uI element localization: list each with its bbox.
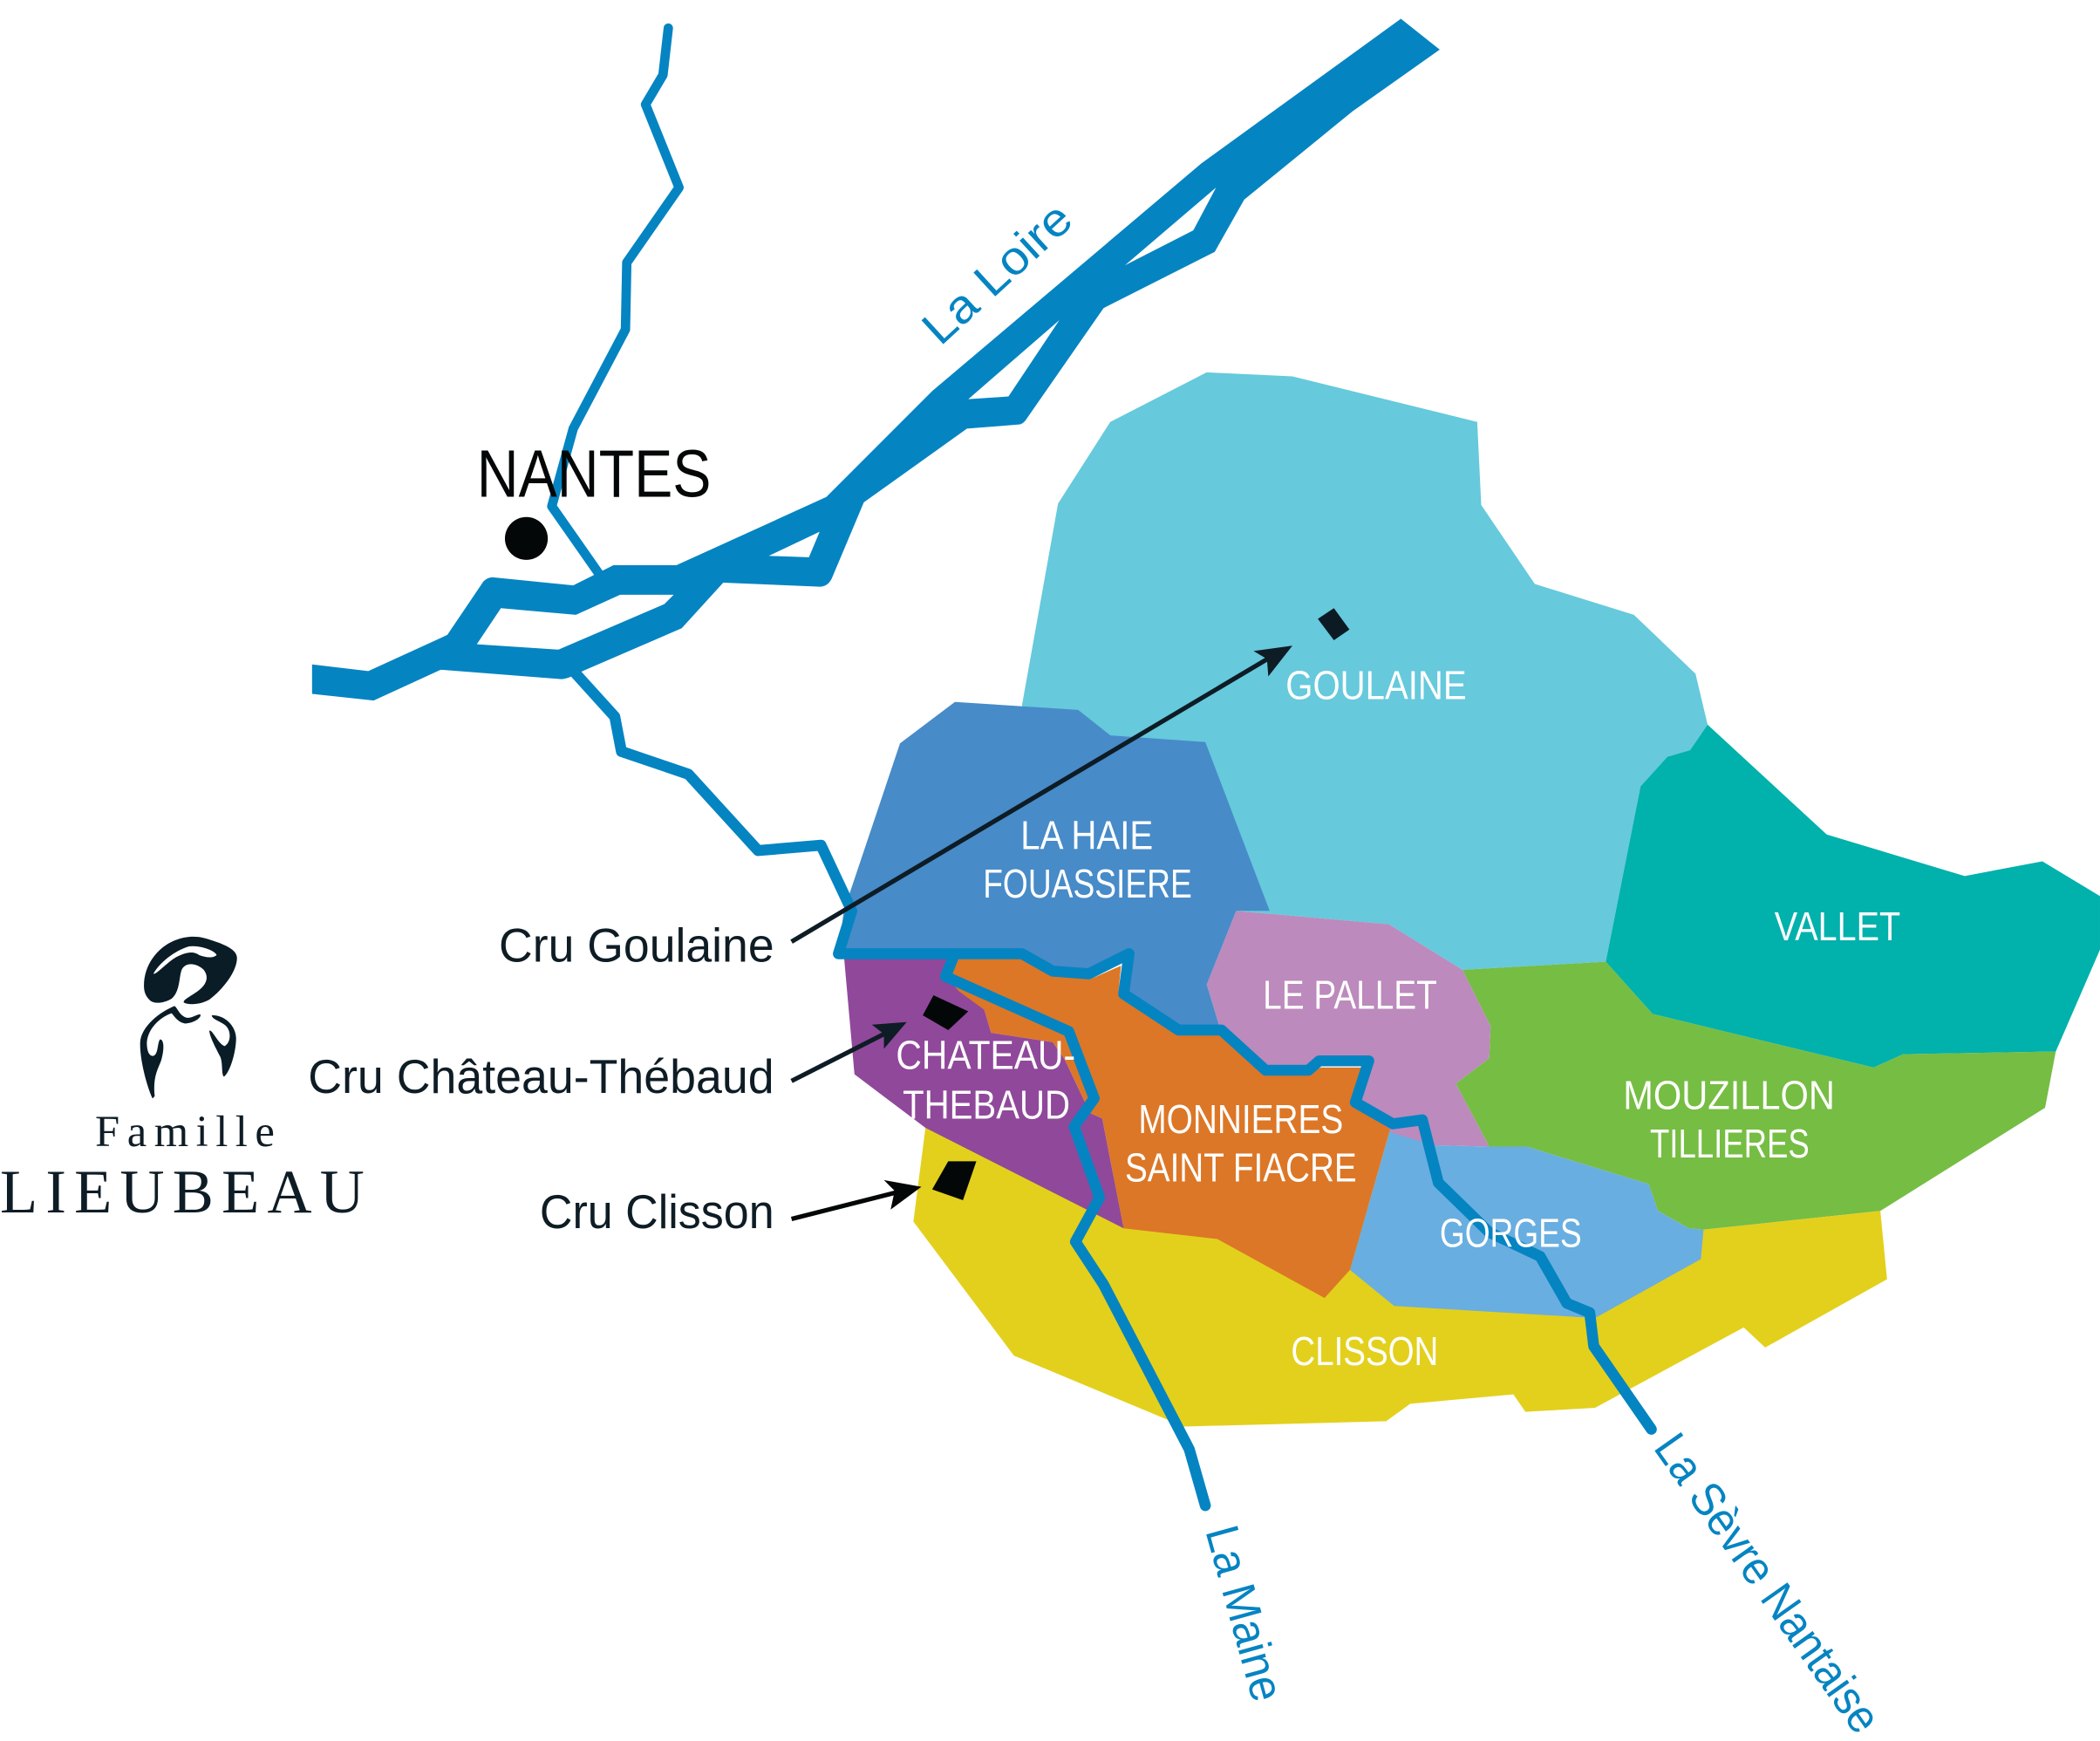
region label: La Haie Fouassiere: LA HAIE: [1020, 813, 1153, 858]
river label: La Loire: La Loire: [912, 192, 1082, 355]
logo text: Famille: Famille: [95, 1107, 275, 1156]
map regions: [838, 372, 2100, 1426]
region label: Mouzillon Tillieres: TILLIERES: [1650, 1121, 1810, 1166]
river: La Sevre Nantaise: [576, 673, 1652, 1430]
river: La Loire: [312, 18, 1440, 700]
region label: Le Pallet: LE PALLET: [1263, 972, 1437, 1017]
cru marker: Goulaine: [1318, 608, 1349, 640]
region label: La Haie Fouassiere: FOUASSIERE: [983, 861, 1192, 906]
region: Clisson: [913, 1128, 1887, 1426]
region label: Chateau-Thebaud: CHATEAU-: [896, 1032, 1075, 1077]
logo: Famille Lieubeau: [0, 937, 365, 1226]
region: Goulaine: [1022, 372, 1708, 970]
region label: Mouzillon Tillieres: [1623, 1073, 1835, 1166]
region label: Monnieres Saint Fiacre: [1125, 1096, 1357, 1190]
region label: La Haie Fouassiere: [983, 813, 1192, 906]
arrow: Cru Chateau-Thebaud: [792, 1022, 907, 1081]
region label: Monnieres Saint Fiacre: SAINT FIACRE: [1125, 1144, 1357, 1190]
region label: Chateau-Thebaud: [896, 1032, 1075, 1127]
cru marker: Clisson: [932, 1161, 977, 1200]
arrow: Cru Clisson: [792, 1180, 922, 1219]
cru marker: Chateau-Thebaud: [923, 995, 968, 1030]
river: northern tributary: [552, 28, 679, 573]
region: Monnieres Saint Fiacre: [945, 956, 1390, 1298]
region: Mouzillon Tillieres: [1456, 962, 2056, 1230]
river: La Maine: [945, 956, 1205, 1505]
region: Le Pallet: [1207, 911, 1490, 1147]
region label: Clisson: CLISSON: [1291, 1328, 1438, 1374]
label: Cru Chateau-Thebaud: Cru Château-Thébaud: [308, 1050, 774, 1103]
region label: Chateau-Thebaud: THEBAUD: [903, 1082, 1070, 1127]
city label: Nantes: NANTES: [477, 437, 711, 512]
region: Gorges: [1350, 1130, 1703, 1318]
arrow: Cru Goulaine: [792, 645, 1292, 942]
region label: Monnieres Saint Fiacre: MONNIERES: [1138, 1096, 1343, 1142]
logo text: Lieubeau: LIEUBEAU: [0, 1158, 365, 1226]
region: La Haie Fouassiere: [838, 702, 1270, 1030]
label: Cru Goulaine: Cru Goulaine: [499, 919, 774, 973]
region label: Vallet: VALLET: [1775, 904, 1900, 949]
river label: La Maine: La Maine: [1196, 1519, 1293, 1707]
region label: Goulaine: GOULAINE: [1285, 663, 1467, 708]
region label: Mouzillon Tillieres: MOUZILLON: [1623, 1073, 1835, 1118]
city dot: Nantes: [505, 517, 548, 560]
logo icon: woman with hat: [140, 937, 237, 1098]
region: Vallet: [1606, 725, 2100, 1068]
label: Cru Clisson: Cru Clisson: [540, 1185, 774, 1239]
region label: Gorges: GORGES: [1440, 1211, 1582, 1256]
region: Chateau-Thebaud: [844, 953, 1123, 1228]
